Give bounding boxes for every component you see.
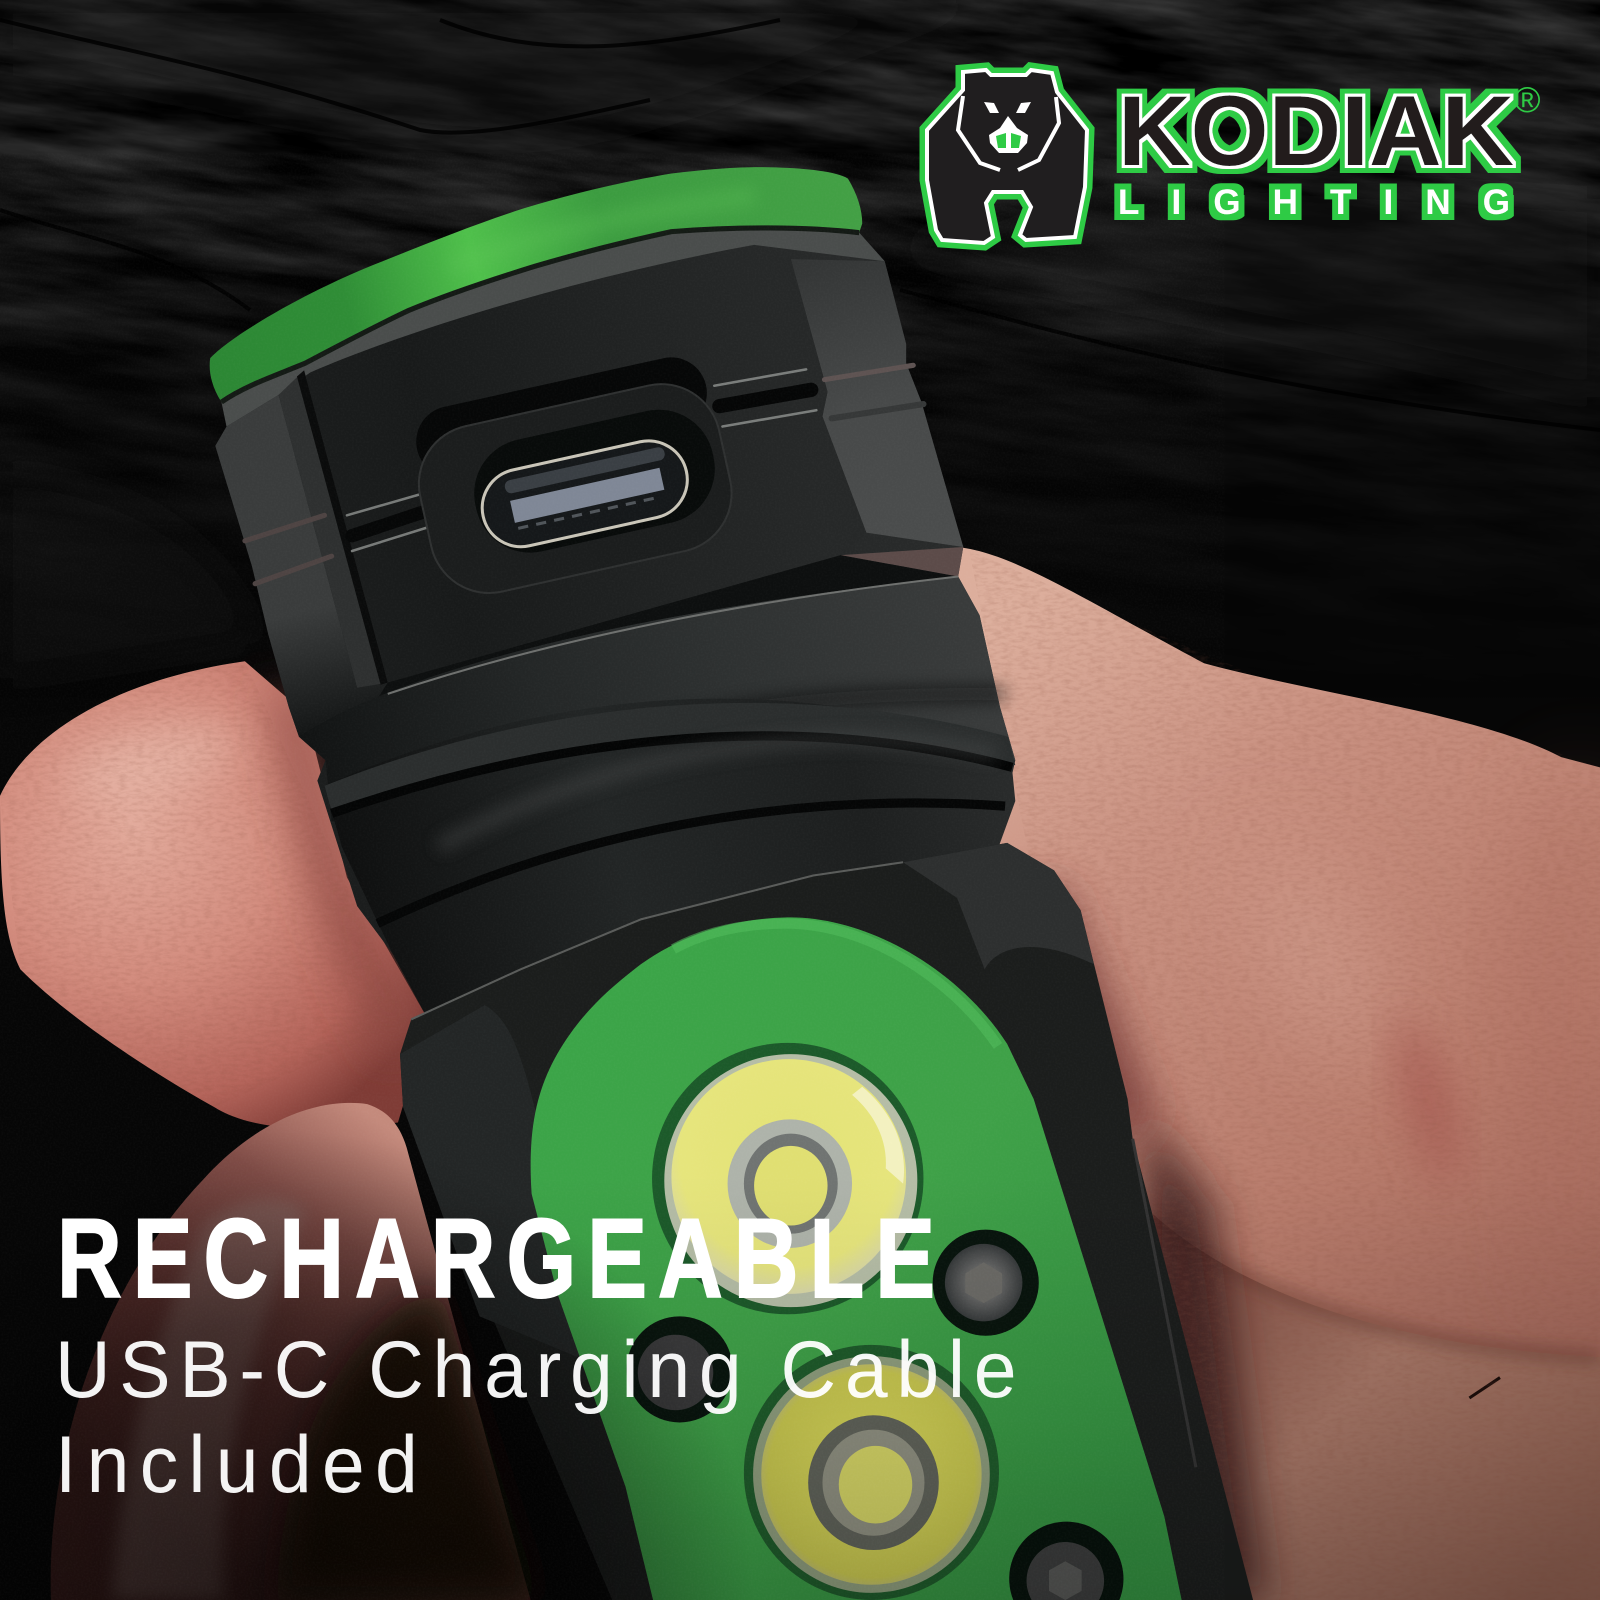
- dark gradient behind caption: [0, 1122, 1600, 1600]
- usb-c port: [402, 350, 743, 604]
- head upper grey ring: [221, 228, 885, 427]
- skin texture: [2, 554, 1600, 1414]
- lower housing: [400, 843, 1253, 1600]
- caption: [55, 1197, 1025, 1509]
- grooves: [245, 365, 923, 584]
- index finger on the left: [0, 661, 429, 1129]
- bear arm lines: [958, 96, 1059, 170]
- right side shaded band: [791, 259, 963, 547]
- right vertical ridge: [754, 245, 866, 555]
- bear eyes: [984, 102, 1031, 113]
- metal connector shell: [475, 433, 695, 554]
- logo: Kodiak Lighting: [927, 70, 1541, 243]
- background: dark charred wood: [0, 0, 1600, 634]
- wordmark KODIAK: KODIAK: [1118, 75, 1514, 186]
- upper led: [652, 1043, 923, 1314]
- port opening: [464, 399, 725, 563]
- bear silhouette: [927, 70, 1087, 243]
- port surround plate: [407, 373, 743, 604]
- green end cap: [210, 167, 862, 402]
- wordmark LIGHTING: LIGHTING: [1118, 183, 1510, 222]
- upper right screw: [933, 1230, 1039, 1336]
- neck: [324, 699, 1015, 1020]
- connector tongue: [510, 468, 664, 523]
- registered mark: ®: [1514, 79, 1541, 120]
- lower led: [744, 1345, 999, 1600]
- green plate: [531, 917, 1182, 1600]
- port recess shadow: [409, 351, 714, 484]
- headline: RECHARGEABLE: [57, 1197, 946, 1321]
- right hand: palm and finger behind the flashlight: [918, 547, 1600, 1600]
- recess under head panel: [299, 555, 958, 737]
- surface grain: [0, 153, 1224, 1600]
- bear white outline: [927, 70, 1087, 243]
- head body: [215, 228, 1015, 1020]
- subheading line 2: Included: [55, 1418, 428, 1509]
- lower left screw: [627, 1316, 733, 1422]
- connector upper shine: [504, 446, 666, 494]
- bear nose: [989, 116, 1028, 153]
- bottom screw: [1009, 1522, 1123, 1600]
- left vertical ridge: [279, 370, 388, 688]
- thumb at lower left: [51, 1103, 541, 1600]
- collar ring: [299, 577, 1015, 821]
- left side shaded band: [215, 395, 388, 737]
- bear mark: [927, 70, 1087, 243]
- subheading line 1: USB-C Charging Cable: [55, 1323, 1025, 1414]
- flashlight: [210, 167, 1253, 1600]
